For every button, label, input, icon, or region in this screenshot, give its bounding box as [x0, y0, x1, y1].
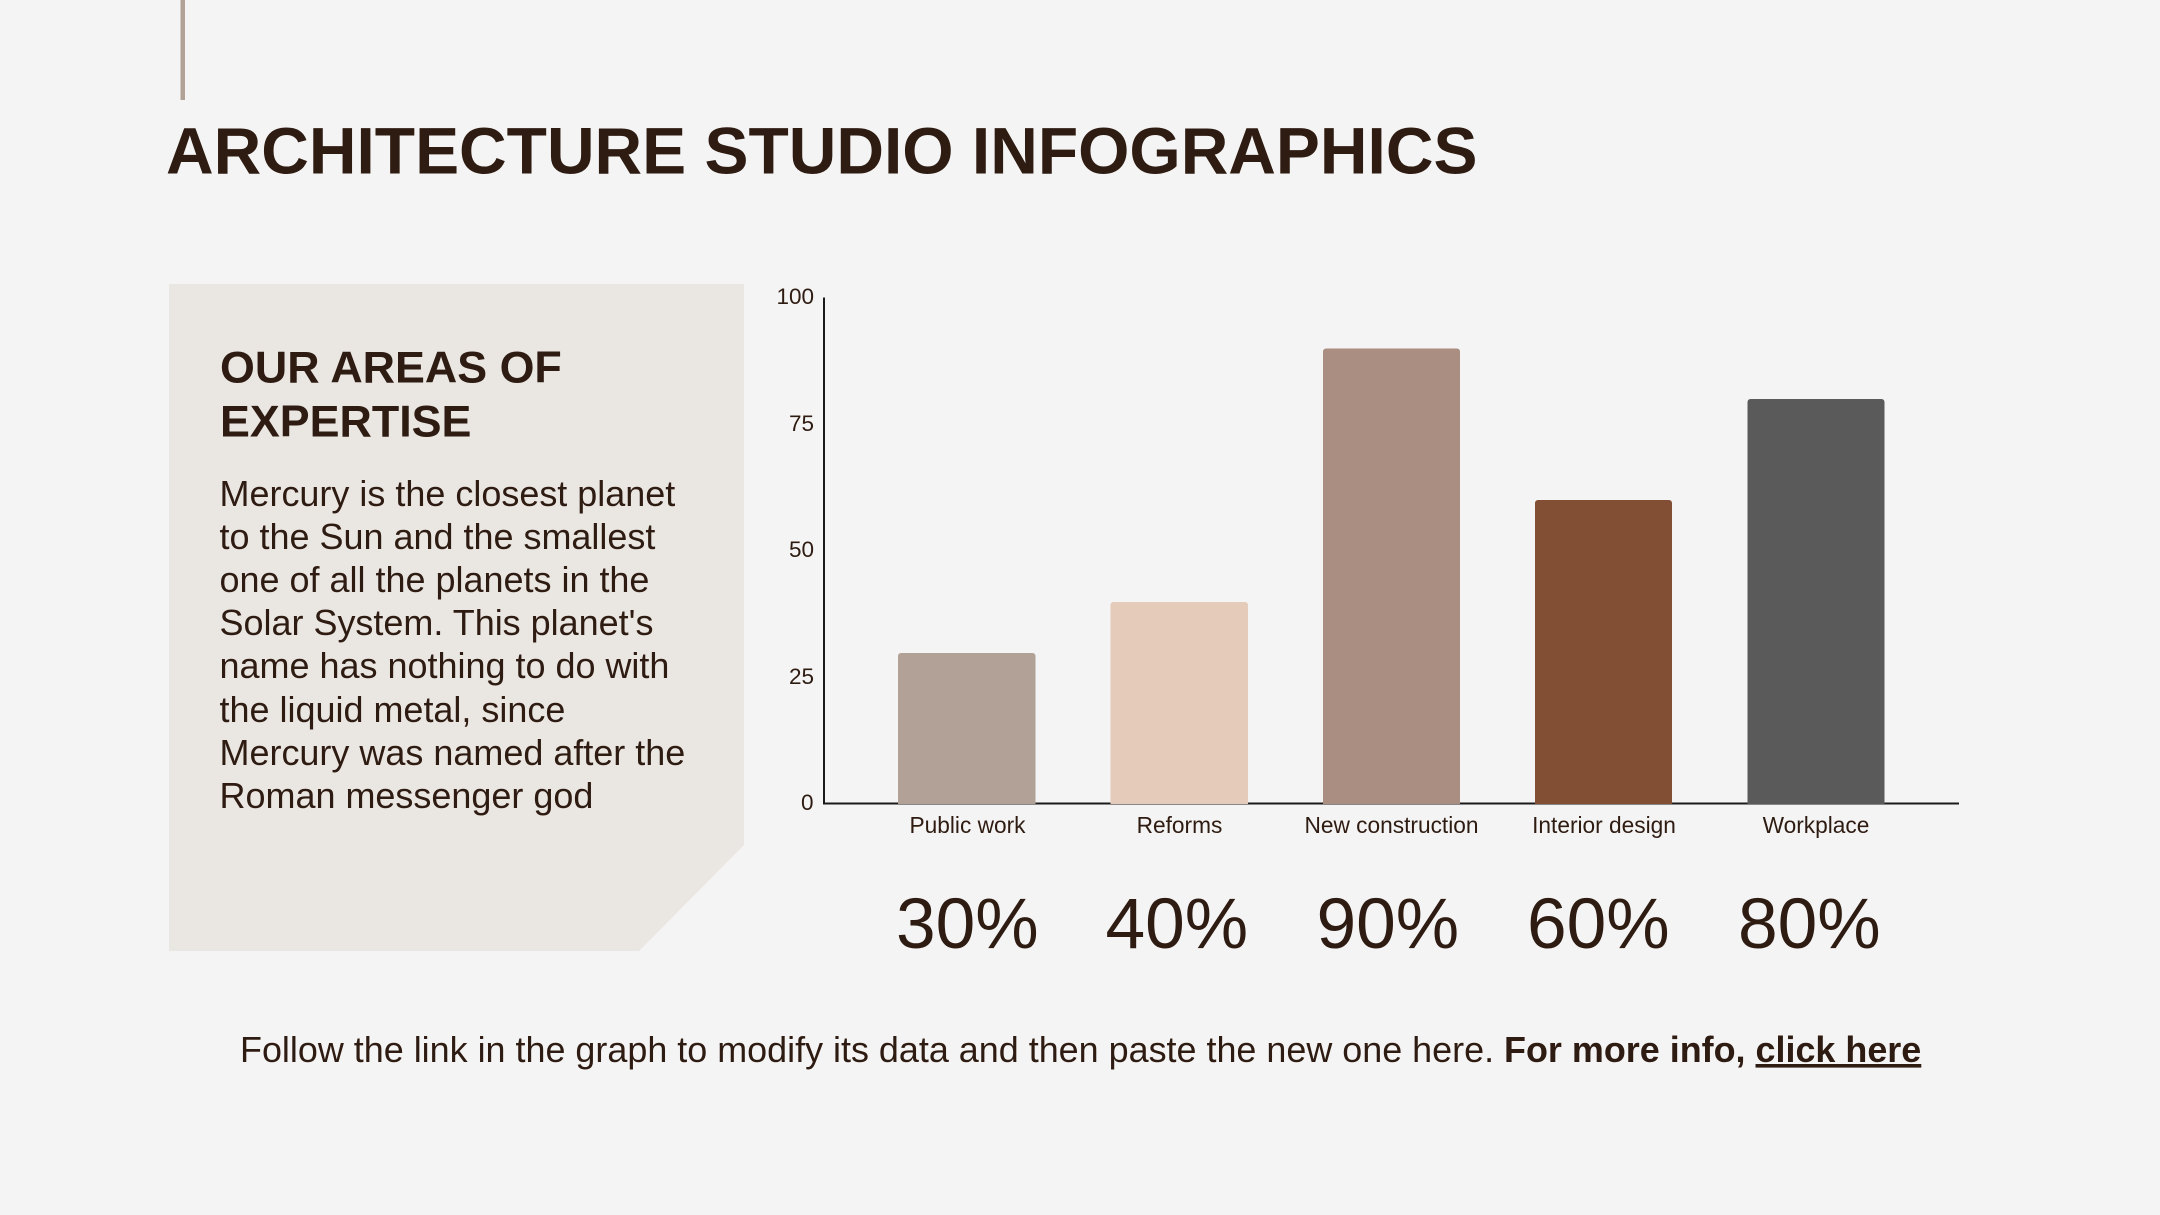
percentage values: 90%: [1316, 884, 1459, 964]
bar: reforms 40: [1110, 602, 1248, 804]
bar: workplace 80: [1748, 399, 1884, 804]
panel body text: Roman messenger god: [220, 775, 593, 816]
panel body text: to the Sun and the smallest: [220, 516, 655, 557]
y axis labels: 0: [801, 790, 814, 815]
panel heading: EXPERTISE: [220, 396, 471, 446]
category labels: Reforms: [1137, 812, 1222, 838]
bar: new construction 90: [1323, 348, 1460, 804]
panel body text: name has nothing to do with: [220, 645, 669, 686]
category labels: Interior design: [1532, 812, 1676, 838]
bar chart: [776, 284, 1959, 838]
percentage values: [896, 884, 1881, 964]
panel body text: Solar System. This planet's: [220, 602, 654, 643]
bar: interior design 60: [1535, 500, 1672, 804]
category labels: Workplace: [1763, 812, 1869, 838]
y axis labels: 25: [789, 664, 814, 689]
y axis labels: 100: [776, 284, 814, 309]
y axis labels: [776, 284, 814, 815]
axes: [824, 298, 1959, 804]
panel: our areas of expertise: [169, 284, 744, 951]
title: ARCHITECTURE STUDIO INFOGRAPHICS: [166, 114, 1477, 188]
percentage values: 30%: [896, 884, 1039, 964]
panel body text: Mercury was named after the: [220, 732, 685, 773]
bar: public work 30: [898, 653, 1036, 804]
panel body text: one of all the planets in the: [220, 559, 649, 600]
percentage values: 60%: [1527, 884, 1670, 964]
y axis labels: 75: [789, 411, 814, 436]
panel background: [169, 284, 744, 951]
category labels: [910, 812, 1869, 838]
percentage values: 40%: [1106, 884, 1248, 964]
panel body text: Mercury is the closest planet: [220, 473, 675, 514]
panel body text: the liquid metal, since: [220, 689, 565, 730]
percentage values: 80%: [1738, 884, 1881, 964]
panel heading: OUR AREAS OF: [220, 342, 562, 392]
footer note: Follow the link in the graph to modify its data and then paste the new one here. For more info, click here: [240, 1029, 1921, 1070]
category labels: New construction: [1304, 812, 1479, 838]
decorative accent bar: [180, 0, 185, 100]
category labels: Public work: [910, 812, 1026, 838]
y axis labels: 50: [789, 537, 814, 562]
